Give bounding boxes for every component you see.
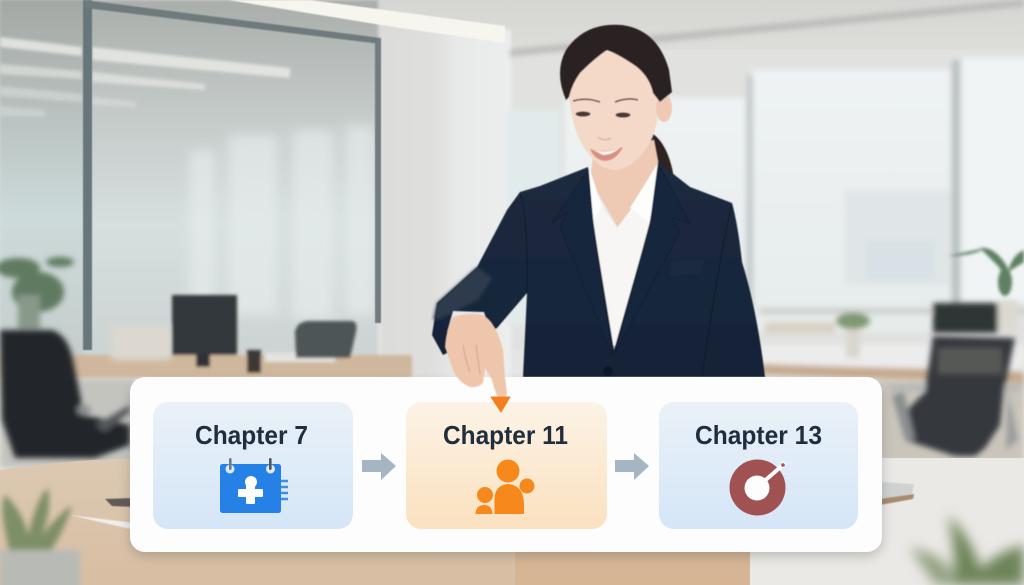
right plant — [948, 248, 1024, 296]
woman in navy suit — [432, 25, 765, 377]
icon: calendar with plus — [220, 458, 288, 513]
jacket button — [603, 366, 613, 376]
heading: Chapter 13: Chapter 13 — [695, 420, 822, 450]
head — [569, 50, 658, 170]
shirt cuff — [447, 311, 486, 338]
glass reflections — [0, 37, 290, 117]
hair — [560, 25, 672, 102]
sleeve seam — [702, 205, 732, 377]
right wall band — [505, 50, 1024, 350]
hand — [445, 314, 507, 398]
ear — [656, 94, 672, 122]
left conference table — [0, 458, 520, 585]
chair on the left — [0, 330, 130, 458]
ceiling — [0, 0, 1024, 110]
card: Chapter 13 — [659, 402, 858, 529]
plant behind glass — [0, 257, 74, 330]
smile — [590, 147, 623, 161]
card: Chapter 7 — [153, 402, 353, 529]
left sleeve highlight — [433, 267, 492, 320]
neck — [590, 140, 660, 228]
desk and chair on the right — [695, 300, 1024, 384]
floor on the right — [878, 380, 1024, 462]
foreground plant left — [0, 488, 80, 585]
ponytail — [648, 132, 674, 178]
arrow: Chapter 7 to Chapter 11 — [362, 453, 396, 480]
jacket body — [432, 162, 765, 377]
white wall pillar — [381, 30, 511, 380]
glass frame — [83, 0, 381, 350]
icon: target with pointer — [730, 460, 786, 516]
arrow: Chapter 11 to Chapter 13 — [615, 453, 649, 480]
shirt — [590, 165, 658, 345]
pointer: orange triangle — [491, 397, 510, 412]
desk on the left — [0, 295, 412, 378]
heading: Chapter 7: Chapter 7 — [195, 420, 308, 450]
papers on table — [105, 498, 135, 507]
lapels — [552, 170, 613, 357]
chair on the right — [890, 336, 1020, 456]
nose shadow — [598, 137, 611, 140]
glass wall on the left — [0, 0, 378, 360]
panel shadow — [130, 384, 882, 556]
table under panel — [515, 540, 755, 585]
right white table — [750, 458, 1024, 585]
pointing hand and cuff — [445, 311, 507, 398]
foreground plant right — [910, 515, 1024, 585]
flow panel — [130, 377, 882, 552]
ceiling light — [228, 0, 505, 43]
panel background — [130, 377, 882, 552]
heading: Chapter 11: Chapter 11 — [443, 420, 568, 450]
laptop on right table — [880, 482, 914, 500]
icon: group of people — [476, 460, 534, 514]
brows and eyes — [573, 99, 638, 118]
windows on the right — [507, 0, 1024, 335]
floor on the left — [0, 378, 135, 468]
card: Chapter 11 highlighted — [406, 402, 607, 529]
